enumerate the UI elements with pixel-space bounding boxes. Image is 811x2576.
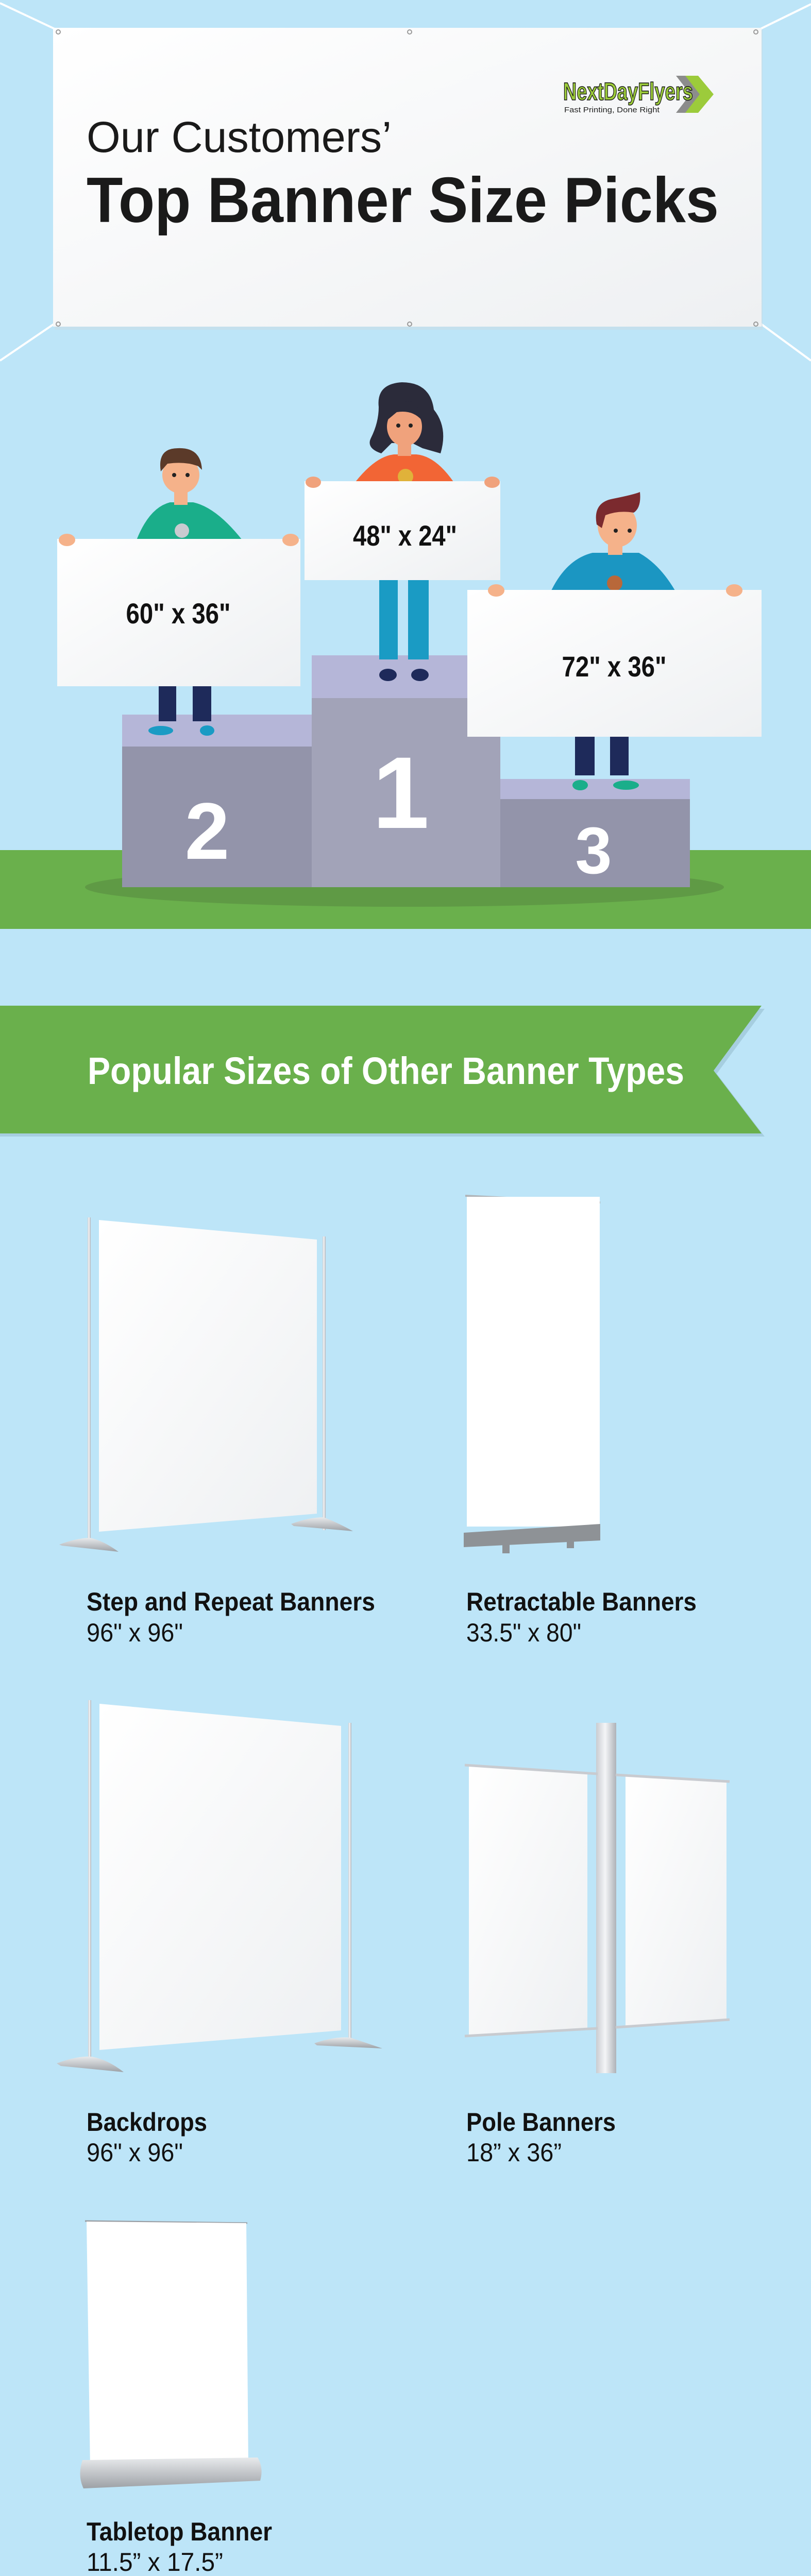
logo: Fast Printing, Done Right	[564, 106, 660, 114]
product: backdrops	[57, 1700, 382, 2167]
label: Step and Repeat Banners	[87, 1587, 375, 1616]
title line 2: Top Banner Size Picks	[87, 165, 719, 236]
product: step and repeat: 96" x 96"	[87, 1618, 183, 1647]
podium	[122, 655, 690, 888]
section ribbon: Popular Sizes of Other Banner Types	[88, 1049, 684, 1092]
product: tabletop	[80, 2221, 272, 2576]
label: Tabletop Banner	[87, 2517, 272, 2546]
person 3 with banner 72x36	[467, 492, 762, 790]
product: pole banners: 18” x 36”	[466, 2138, 562, 2167]
product: retractable	[464, 1195, 697, 1647]
place numbers: 2	[185, 787, 229, 876]
product: retractable: 33.5" x 80"	[466, 1618, 581, 1647]
person 2 with banner 60x36	[57, 448, 300, 736]
section ribbon	[0, 1006, 765, 1137]
podium: 3	[575, 814, 612, 888]
podium: 1	[373, 736, 429, 850]
person 1 with banner 48x24	[305, 382, 500, 681]
size label 72x36: 72" x 36"	[562, 650, 667, 683]
label: Pole Banners	[466, 2108, 616, 2137]
product: step and repeat	[59, 1217, 375, 1647]
hero banner	[0, 3, 811, 361]
title line 1: Our Customers’	[87, 113, 392, 161]
product: backdrops: 96" x 96"	[87, 2138, 183, 2167]
label: Backdrops	[87, 2108, 207, 2137]
ground	[0, 850, 811, 929]
product: pole banners	[465, 1723, 730, 2167]
podium shadow	[85, 868, 724, 907]
label: Retractable Banners	[466, 1587, 697, 1616]
product: tabletop: 11.5” x 17.5”	[87, 2548, 223, 2576]
size label 60x36: 60" x 36"	[126, 597, 231, 630]
logo	[563, 76, 714, 114]
size label 48x24: 48" x 24"	[353, 519, 457, 552]
logo: NextDayFlyers	[563, 78, 693, 106]
